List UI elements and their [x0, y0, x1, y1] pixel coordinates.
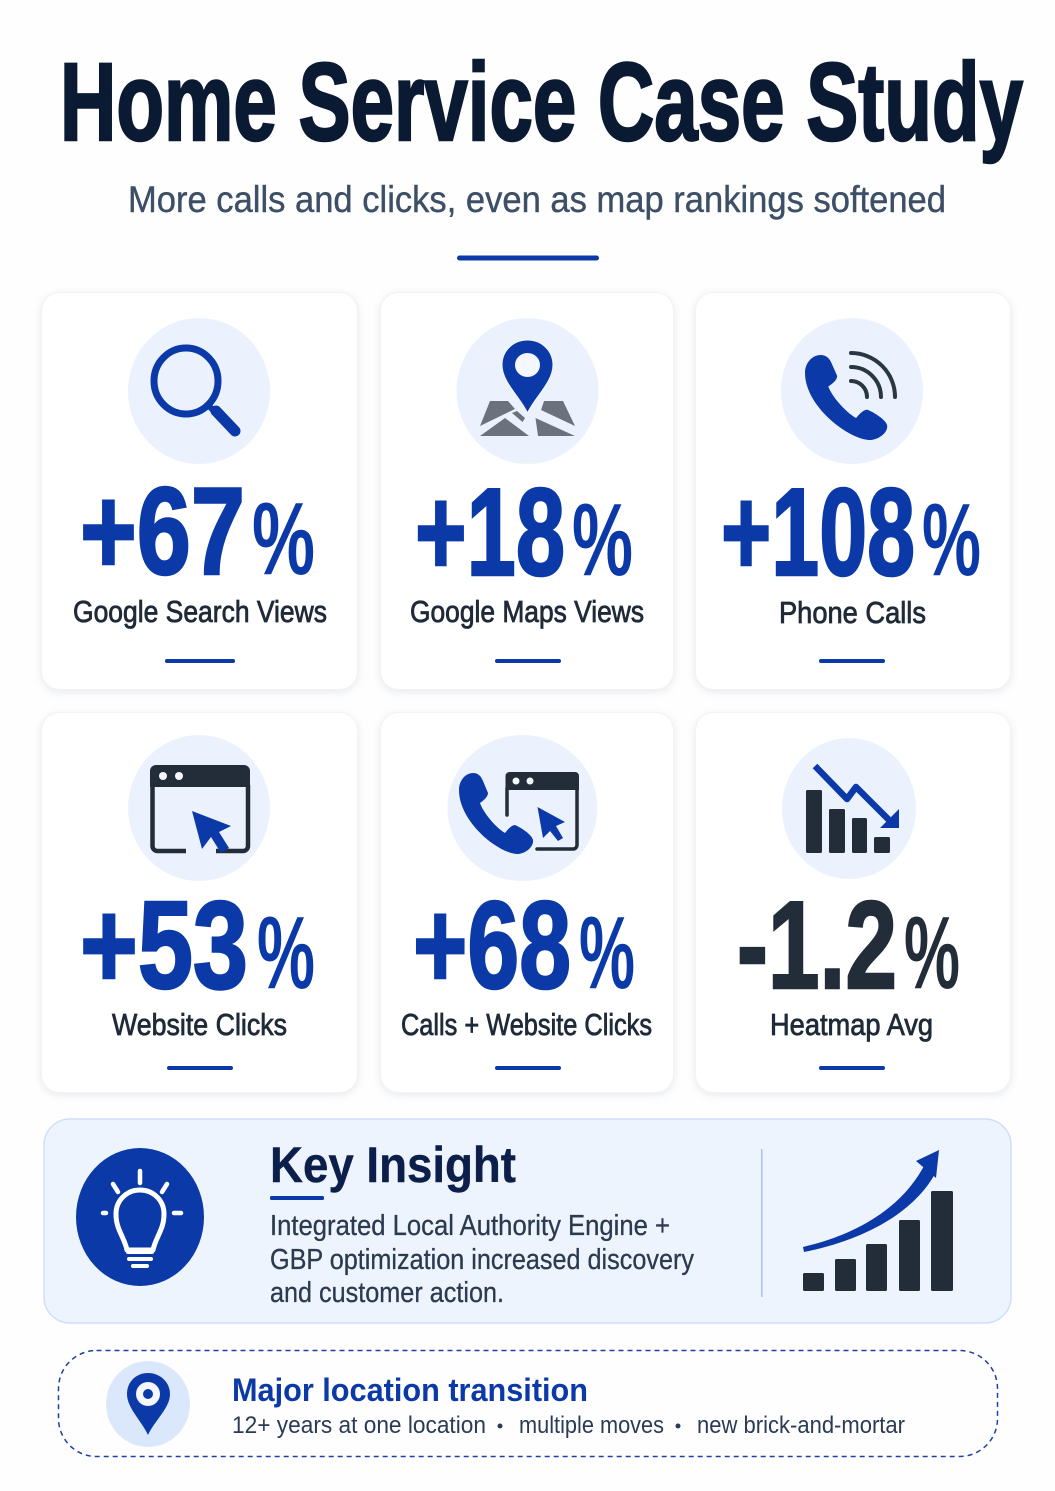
metric: +18 — [415, 464, 565, 602]
metric: -1.2 — [737, 877, 897, 1015]
metric: % — [922, 482, 981, 597]
icon: map pin — [456, 318, 598, 464]
details: new brick-and-mortar — [697, 1412, 905, 1439]
metric: % — [904, 895, 960, 1010]
metric: +108 — [721, 464, 915, 602]
icon: light bulb — [76, 1148, 204, 1286]
icon: phone and browser — [448, 735, 598, 881]
insight text: Integrated Local Authority Engine + — [270, 1210, 670, 1242]
insight text — [270, 1210, 695, 1309]
icon: rising bar chart — [803, 1150, 953, 1291]
metric: % — [252, 481, 315, 596]
label: Heatmap Avg — [770, 1007, 933, 1042]
icon: falling bar chart — [782, 738, 916, 879]
details: 12+ years at one location — [232, 1412, 486, 1439]
label: Google Maps Views — [410, 594, 644, 629]
panel: Google Search Views — [42, 292, 358, 690]
metric: +68 — [413, 877, 571, 1015]
title divider — [457, 256, 599, 260]
icon: phone with signal — [781, 318, 923, 464]
panel: Website Clicks — [42, 712, 358, 1092]
metric: % — [257, 895, 315, 1010]
insight text: and customer action. — [270, 1277, 504, 1309]
metric: +53 — [80, 877, 248, 1015]
insight text: GBP optimization increased discovery — [270, 1244, 695, 1276]
label: Google Search Views — [73, 594, 327, 629]
subtitle: More calls and clicks, even as map rankings softened — [128, 179, 946, 220]
heading: Major location transition — [232, 1372, 588, 1408]
panel: major location transition — [58, 1350, 998, 1456]
details: multiple moves — [519, 1412, 664, 1439]
panel: Google Maps Views — [380, 292, 674, 690]
details — [232, 1412, 905, 1439]
panel: Phone Calls — [696, 292, 1010, 690]
label: Website Clicks — [112, 1007, 287, 1042]
icon: location pin — [106, 1361, 190, 1447]
heading: Key Insight — [270, 1137, 516, 1193]
panel: Calls + Website Clicks — [380, 712, 674, 1092]
icon: browser window with cursor — [128, 735, 270, 881]
label: Calls + Website Clicks — [401, 1007, 652, 1042]
metric: % — [579, 895, 635, 1010]
metric: % — [572, 482, 633, 597]
panel: key insight — [44, 1119, 1011, 1323]
label: Phone Calls — [779, 595, 926, 630]
icon: magnifying glass — [128, 318, 270, 464]
panel: Heatmap Avg — [696, 712, 1010, 1092]
metric: +67 — [80, 463, 245, 601]
